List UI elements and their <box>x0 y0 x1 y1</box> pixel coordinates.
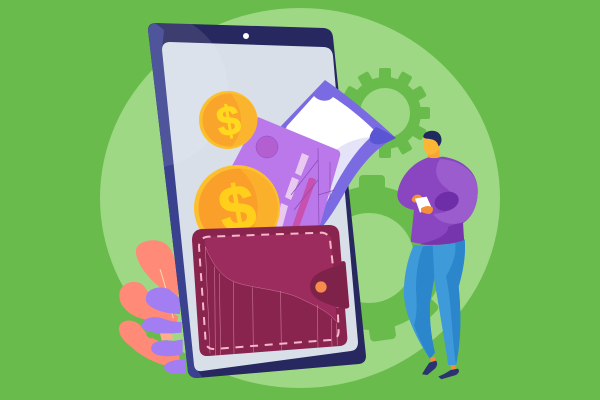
trouser shading right <box>446 239 465 364</box>
card slots <box>276 153 309 228</box>
icon: lower gear <box>289 175 455 342</box>
trousers <box>404 239 465 365</box>
leaf: salmon bottom <box>119 321 182 368</box>
fingers <box>421 206 433 214</box>
credit card <box>228 117 340 232</box>
clasp button <box>315 281 327 293</box>
leaf: salmon top <box>136 240 178 298</box>
screen <box>162 42 358 371</box>
banknote <box>268 80 396 232</box>
icon: upper gear <box>340 68 430 158</box>
card pink stripe <box>291 178 316 230</box>
dollar sign: $ <box>213 96 244 146</box>
card body <box>228 117 340 232</box>
wallet clasp <box>310 261 349 309</box>
dollar sign: $ <box>213 170 261 247</box>
sweater <box>397 157 478 245</box>
shoe right <box>438 369 459 379</box>
leaf: purple cluster <box>146 287 180 314</box>
person <box>397 131 478 379</box>
pocket lines <box>205 247 337 355</box>
screen highlight <box>148 23 212 166</box>
hair <box>423 131 442 146</box>
sleeve highlight <box>433 159 478 224</box>
wallet app illustration <box>100 8 500 388</box>
arm shadow <box>432 189 461 214</box>
leaf: salmon middle <box>119 282 178 323</box>
trouser shading left <box>414 245 435 359</box>
face <box>423 135 441 155</box>
note lavender fold <box>296 137 371 230</box>
stitching <box>199 233 339 349</box>
coin: small <box>199 91 257 149</box>
phone left edge <box>148 23 202 378</box>
leaf vein <box>160 269 173 318</box>
note knob <box>370 127 396 144</box>
ankles <box>430 357 456 372</box>
background circle <box>100 8 500 388</box>
shoe left <box>422 361 437 375</box>
coin: large <box>194 165 280 251</box>
neck <box>427 150 440 159</box>
hand holding phone <box>412 195 423 203</box>
wallet body <box>192 225 347 356</box>
phone <box>148 23 366 378</box>
card circle <box>256 136 278 158</box>
leaves: plant behind phone <box>119 240 186 374</box>
smartphone <box>415 197 432 213</box>
wallet flap <box>205 233 337 322</box>
phone body <box>148 23 366 378</box>
sweater hem shadow <box>420 222 464 245</box>
card grid lines <box>291 148 335 232</box>
legs <box>404 239 465 365</box>
camera <box>243 33 249 39</box>
note white face <box>285 96 374 152</box>
note frame <box>268 80 396 232</box>
wallet <box>192 225 349 356</box>
